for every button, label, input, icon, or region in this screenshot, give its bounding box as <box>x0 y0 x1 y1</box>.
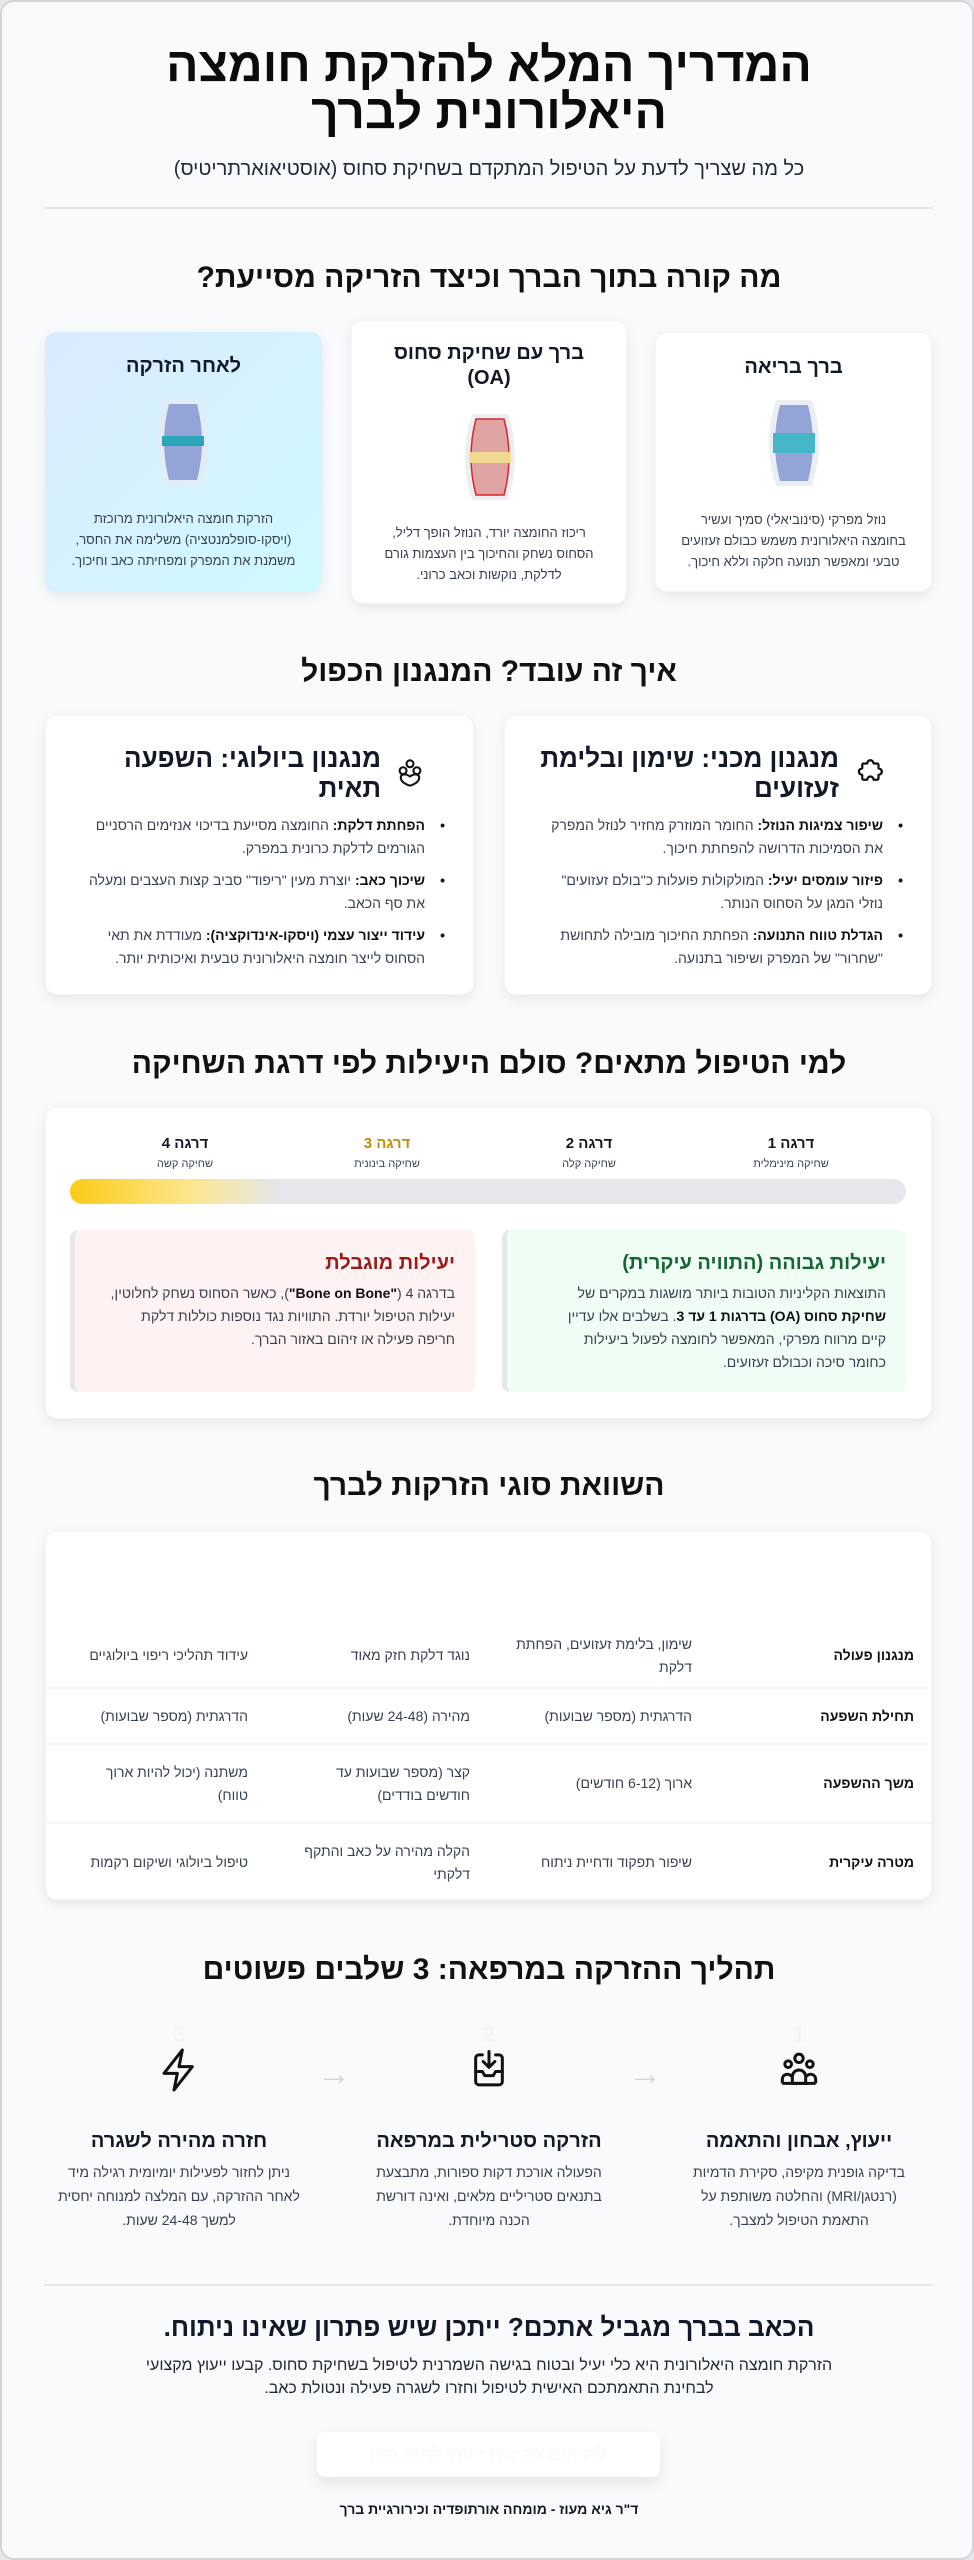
comparison table: הדרגתית (מספר שבועות) <box>544 1708 692 1724</box>
callout: limited efficacy <box>70 1230 475 1392</box>
card title: healthy: ברך בריאה <box>744 356 843 378</box>
CTA text: הזרקת חומצה היאלורונית היא כלי יעיל ובטוח בגישה השמרנית לטיפול בשחיקת סחוס. קבעו ייעוץ מקצועי לבחינת התאמתכם האישית לטיפול וחזרו לשגרה פעילה ונטולת כאב. <box>146 2357 832 2397</box>
step 2: הפעולה אורכת דקות ספורות, מתבצעת בתנאים סטריליים מלאים, ואינה דורשת הכנה מיוחדת. <box>376 2164 602 2228</box>
level 3 <box>354 1135 420 1170</box>
step 1: 1 <box>793 2022 805 2047</box>
step 2 <box>376 2022 602 2228</box>
title <box>166 39 812 139</box>
level 2: דרגה 2 <box>566 1135 612 1152</box>
heading: biological: מנגנון ביולוגי: השפעה <box>124 743 381 773</box>
comparison table: תחילת השפעה <box>820 1708 914 1724</box>
panel: after injection <box>45 332 322 592</box>
icon: inbox download <box>474 2050 504 2086</box>
card title: OA: (OA) <box>467 367 511 389</box>
step 3 <box>58 2022 300 2228</box>
bullets: biological <box>89 817 445 966</box>
comparison table: הקלה מהירה על כאב והתקף דלקתי <box>304 1842 470 1882</box>
step 2: הזרקה סטרילית במרפאה <box>376 2130 602 2152</box>
card title: OA: ברך עם שחיקת סחוס <box>394 342 584 364</box>
subtitle: כל מה שצריך לדעת על הטיפול המתקדם בשחיקת סחוס (אוסטיאוארתריטיס) <box>174 158 804 180</box>
icon: cells <box>398 759 422 787</box>
level 1 <box>753 1135 829 1170</box>
comparison table: מטרה עיקרית <box>829 1854 914 1870</box>
comparison table: שימון, בלימת זעזועים, הפחתת דלקת <box>516 1636 692 1674</box>
comparison table: טיפול ביולוגי ושיקום רקמות <box>90 1854 248 1870</box>
CTA button <box>317 2432 660 2477</box>
icon: treated knee <box>158 399 208 485</box>
comparison table: חומצה היאלורונית <box>578 1570 692 1586</box>
level 2: שחיקה קלה <box>562 1158 616 1170</box>
card title: OA <box>394 342 584 389</box>
comparison table: נוגד דלקת חזק מאוד <box>351 1647 470 1663</box>
comparison table: עידוד תהליכי ריפוי ביולוגיים <box>89 1647 248 1663</box>
comparison table: מנגנון פעולה <box>834 1647 914 1663</box>
comparison table: שיפור תפקוד ודחיית ניתוח <box>541 1854 692 1870</box>
heading: biological <box>124 743 381 803</box>
arrow 2: → <box>317 2055 351 2093</box>
panel: OA knee <box>351 320 627 604</box>
heading: dual mechanism: איך זה עובד? המנגנון הכפול <box>301 655 677 688</box>
heading: mechanical: זעזועים <box>754 773 839 803</box>
callout text: limited: בדרגה 4 ("Bone on Bone"), כאשר הסחוס נשחק לחלוטין, יעילות הטיפול יורדת. התוויות נגד נוספות כוללות דלקת חריפה פעילה או זיהום באזור הברך. <box>111 1285 455 1347</box>
step 1 <box>693 2022 905 2228</box>
step 3: ניתן לחזור לפעילות יומיומית רגילה מיד לאחר ההזרקה, עם המלצה למנוחה יחסית למשך 24-48 שעות. <box>58 2164 300 2228</box>
comparison table: מהירה (24-48 שעות) <box>347 1708 470 1724</box>
step 3: 3 <box>173 2022 185 2047</box>
level 4: דרגה 4 <box>162 1135 208 1152</box>
level 3: דרגה 3 <box>364 1135 410 1152</box>
icon: users <box>780 2052 818 2085</box>
icon: healthy knee <box>769 400 819 486</box>
heading: comparison: השוואת סוגי הזרקות לברך <box>313 1469 665 1502</box>
comparison table: הדרגתית (מספר שבועות) <box>100 1708 248 1724</box>
callout title: limited: יעילות מוגבלת <box>325 1252 455 1274</box>
step 3: חזרה מהירה לשגרה <box>91 2130 267 2152</box>
level 2 <box>562 1135 616 1170</box>
comparison table: סטרואידים <box>402 1570 470 1586</box>
step 1: ייעוץ, אבחון והתאמה <box>706 2130 892 2152</box>
CTA heading: הכאב בברך מגביל אתכם? ייתכן שיש פתרון שאינו ניתוח. <box>164 2312 814 2342</box>
bullets: mechanical: שיפור צמיגות הנוזל: החומר המוזרק מחזיר לנוזל המפרק את הסמיכות הדרושה להפחתת חיכוך. <box>551 817 883 856</box>
heading: process: תהליך ההזרקה במרפאה: 3 שלבים פשוטים <box>203 1953 775 1986</box>
panel: efficacy scale <box>45 1107 932 1419</box>
icon: lightning <box>162 2048 194 2092</box>
level 1: שחיקה מינימלית <box>753 1158 829 1170</box>
callout: high efficacy <box>502 1230 906 1392</box>
heading: what happens inside the knee: מה קורה בתוך הברך וכיצד הזריקה מסייעת? <box>197 261 781 294</box>
callout title: high: יעילות גבוהה (התוויה עיקרית) <box>622 1252 886 1274</box>
level 4 <box>157 1135 213 1170</box>
icon: puzzle <box>858 759 883 781</box>
comparison table: משך ההשפעה <box>823 1775 914 1791</box>
panel: biological mechanism <box>45 715 474 995</box>
bullets: biological: עידוד ייצור עצמי (ויסקו-אינדוקציה): מעודדת את תאי הסחוס לייצר חומצה היאלורונית טבעית ואיכותית יותר. <box>108 927 425 966</box>
text: OA: ריכוז החומצה יורד, הנוזל הופך דליל, הסחוס נשחק והחיכוך בין העצמות גורם לדלקת, נוקשות וכאב כרוני. <box>384 525 594 582</box>
comparison table: PRP <box>219 1570 248 1586</box>
bullets: mechanical <box>551 817 903 966</box>
comparison table: מאפיין <box>872 1570 914 1586</box>
bullets: mechanical: פיזור עומסים יעיל: המולקולות פועלות כ"בולם זעזועים" נוזלי המגן על הסחוס הנותר. <box>561 872 883 911</box>
level 1: דרגה 1 <box>768 1135 814 1152</box>
heading: mechanical <box>540 743 839 803</box>
bullets: biological: הפחתת דלקת: החומצה מסייעת בדיכוי אנזימים הרסניים הגורמים לדלקת כרונית במפרק. <box>96 817 425 856</box>
icon: OA knee <box>465 414 515 500</box>
step 1: בדיקה גופנית מקיפה, סקירת הדמיות (רנטגן/MRI) והחלטה משותפת על התאמת הטיפול למצבך. <box>693 2164 905 2228</box>
heading: mechanical: מנגנון מכני: שימון ובלימת <box>540 743 839 773</box>
text: after: הזרקת חומצה היאלורונית מרוכזת (ויסקו-סופלמנטציה) משלימה את החסר, משמנת את המפרק ומפחיתה כאב וחיכוך. <box>72 511 295 568</box>
card title: after: לאחר הזרקה <box>126 355 241 377</box>
panel: healthy knee <box>655 332 932 592</box>
CTA button: לתיאום פגישת ייעוץ לחצו כאן <box>370 2444 607 2464</box>
arrow 1: → <box>628 2055 662 2093</box>
comparison table: ארוך (6-12 חודשים) <box>576 1775 692 1791</box>
level 3: שחיקה בינונית <box>354 1158 420 1170</box>
comparison table <box>45 1531 932 1900</box>
heading: biological: תאית <box>319 773 381 803</box>
comparison table: קצר (מספר שבועות עד חודשים בודדים) <box>336 1764 470 1802</box>
step 2: 2 <box>483 2022 495 2047</box>
scale bar <box>70 1179 906 1204</box>
footer: ד"ר גיא מעוז - מומחה אורתופדיה וכירורגיית ברך <box>340 2501 638 2517</box>
bullets: mechanical: הגדלת טווח התנועה: הפחתת החיכוך מובילה לתחושת "שחרור" של המפרק ושיפור בתנועה. <box>560 927 883 966</box>
title: היאלורונית לברך <box>311 86 667 139</box>
comparison table: משתנה (יכול להיות ארוך טווח) <box>106 1764 248 1802</box>
callout text: high: התוצאות הקליניות הטובות ביותר מושגות במקרים של שחיקת סחוס (OA) בדרגות 1 עד 3. בשלבים אלו עדיין קיים מרווח מפרקי, המאפשר לחומצה לפעול ביעילות כחומר סיכה וכבולם זעזועים. <box>568 1285 886 1370</box>
panel: mechanical mechanism <box>504 715 932 995</box>
title: המדריך המלא להזרקת חומצה <box>166 39 812 92</box>
heading: who is it for: למי הטיפול מתאים? סולם היעילות לפי דרגת השחיקה <box>132 1047 846 1080</box>
bullets: biological: שיכוך כאב: יוצרת מעין "ריפוד" סביב קצות העצבים ומעלה את סף הכאב. <box>89 872 425 911</box>
text: healthy: נוזל מפרקי (סינוביאלי) סמיך ועשיר בחומצה היאלורונית משמש כבולם זעזועים טבעי ומאפשר תנועה חלקה וללא חיכוך. <box>681 512 906 569</box>
level 4: שחיקה קשה <box>157 1158 213 1170</box>
